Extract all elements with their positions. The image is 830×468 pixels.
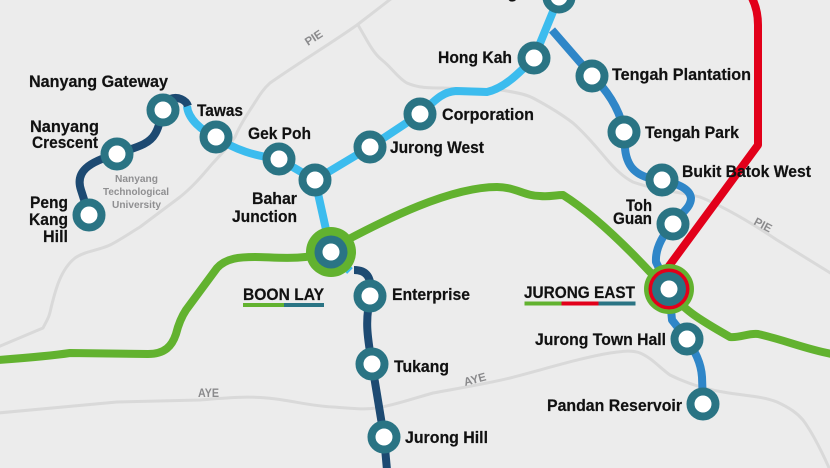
label: Peng Kang Hill: Kang <box>29 211 68 229</box>
label: Tengah Plantation: Tengah Plantation <box>612 66 751 84</box>
label: Tawas: Tawas <box>197 102 243 120</box>
station: Tawas <box>204 124 228 150</box>
station: Bukit Batok West <box>650 168 674 192</box>
station: Peng Kang Hill <box>76 202 102 228</box>
label: Corporation: Corporation <box>442 106 534 124</box>
station: Nanyang Gateway <box>150 98 176 122</box>
station: Tengah Plantation <box>580 64 604 88</box>
station: Toh Guan <box>660 212 686 236</box>
label: Hong Kah: Hong Kah <box>438 49 512 67</box>
label: Jurong Hill: Jurong Hill <box>405 429 488 447</box>
label: Toh Guan: Guan <box>613 210 652 228</box>
station: Nanyang Crescent <box>104 142 130 166</box>
station: Hong Kah <box>522 46 546 70</box>
interchange: Boon Lay <box>306 227 356 277</box>
label: AYE east: AYE <box>463 371 488 389</box>
label: Nanyang Technological University: University <box>112 199 161 211</box>
label: Peng Kang Hill: Peng <box>30 194 68 212</box>
station: Tengah Park <box>612 120 636 144</box>
label: Gek Poh: Gek Poh <box>248 125 311 143</box>
North-South line (red) <box>669 0 758 289</box>
label: Toh Guan <box>613 197 652 228</box>
label: Boon Lay with line colours: BOON LAY <box>243 286 324 304</box>
label: Jurong East with line colours: JURONG EAST <box>524 284 635 302</box>
station: Tengah <box>546 0 572 10</box>
station: Gek Poh <box>266 146 292 172</box>
label: PIE west: PIE <box>303 28 325 49</box>
station: Tukang <box>360 352 384 376</box>
label: Nanyang Technological University: Technological <box>103 186 169 198</box>
label: Bahar Junction: Junction <box>232 208 297 226</box>
label: Bukit Batok West: Bukit Batok West <box>682 163 811 181</box>
East-West line (green) <box>0 187 830 360</box>
station: Corporation <box>408 102 432 126</box>
label: Bahar Junction: Bahar <box>252 190 298 208</box>
Jurong Region Line (dark navy) <box>80 98 387 468</box>
station: Jurong Hill <box>372 424 396 450</box>
label: Nanyang Gateway: Nanyang Gateway <box>29 73 169 91</box>
label: Tengah Park: Tengah Park <box>645 124 740 142</box>
label: Bahar Junction <box>232 190 298 226</box>
label: Jurong West: Jurong West <box>390 139 484 157</box>
Jurong Region Line (light blue) <box>187 0 559 271</box>
label: AYE west: AYE <box>198 388 219 400</box>
station: Jurong Town Hall <box>674 326 700 352</box>
Jurong Region Line branch (mid blue) <box>552 30 703 404</box>
label: Nanyang Technological University <box>103 173 169 211</box>
station: Pandan Reservoir <box>690 392 716 416</box>
label: Tukang: Tukang <box>394 358 449 376</box>
label: Nanyang Crescent: Nanyang <box>30 118 99 136</box>
station: Enterprise <box>358 284 382 308</box>
label: Enterprise: Enterprise <box>392 286 470 304</box>
label: Nanyang Crescent <box>30 118 99 152</box>
label: Pandan Reservoir: Pandan Reservoir <box>547 397 683 415</box>
interchange: Jurong East <box>644 264 694 314</box>
label: Nanyang Technological University: Nanyang <box>115 173 158 185</box>
label: Peng Kang Hill <box>29 194 68 246</box>
station: Bahar Junction <box>302 168 328 192</box>
station: Jurong West <box>358 134 382 160</box>
label: Toh Guan: Toh <box>626 197 652 215</box>
label: Peng Kang Hill: Hill <box>43 228 68 246</box>
label: PIE east: PIE <box>752 216 774 236</box>
label: Nanyang Crescent: Crescent <box>32 134 98 152</box>
label: Jurong Town Hall: Jurong Town Hall <box>535 331 666 349</box>
